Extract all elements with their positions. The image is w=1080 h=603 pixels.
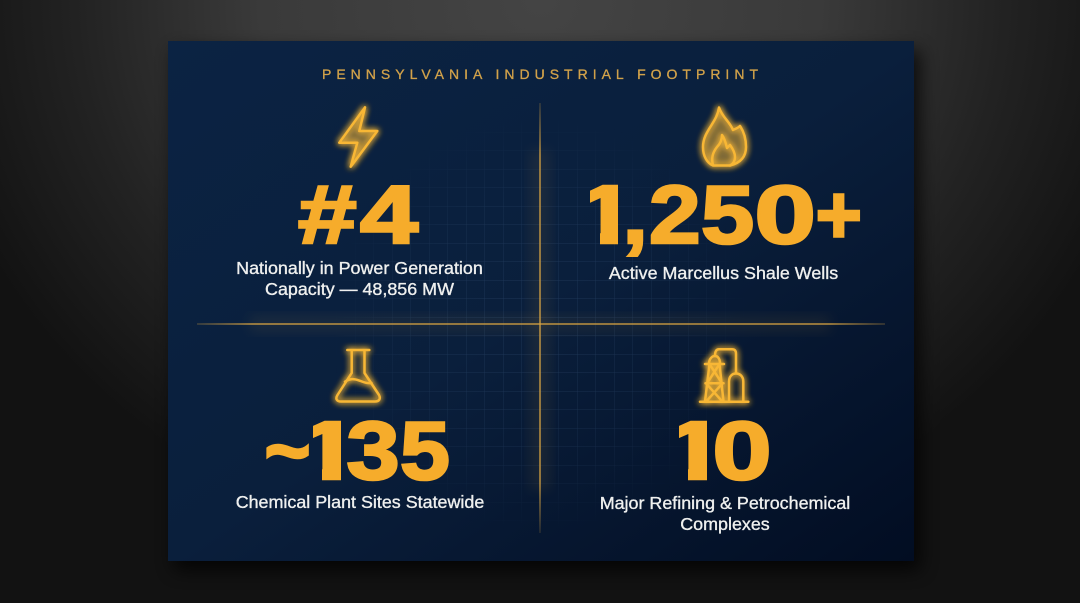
stat: #4 (298, 169, 418, 261)
stat: ~135: 1 (296, 404, 363, 497)
icon: flame (703, 108, 746, 166)
stat: 1,250+: 2 (649, 168, 701, 261)
title: PENNSYLVANIA INDUSTRIAL FOOTPRINT (322, 66, 758, 82)
stat: 1,250+: 0 (754, 168, 816, 261)
stat: 10: 0 (712, 405, 772, 497)
stat: 1,250+: 1 (576, 168, 639, 261)
stat: 10 (679, 420, 769, 482)
panel: refining stat (600, 349, 850, 534)
stat: ~135 (266, 420, 449, 482)
icon: flask (336, 350, 380, 402)
divider lines (197, 103, 885, 533)
label: active wells: Active Marcellus Shale Wells (609, 263, 838, 283)
stat: 1,250+: , (622, 169, 648, 261)
panel: power generation stat (236, 107, 483, 299)
stat: ~135: ~ (264, 405, 311, 497)
label: power generation capacity: Capacity — 48,856 MW (265, 279, 454, 299)
label: chemical plants: Chemical Plant Sites Statewide (236, 492, 484, 512)
label: power generation capacity: Nationally in Power Generation (236, 258, 483, 278)
panel drop shadow (174, 50, 920, 570)
stat: 1,250+: 5 (701, 168, 754, 261)
icon: lightning bolt (339, 107, 377, 167)
stat: ~135: 5 (400, 405, 450, 497)
panel: shale wells stat (576, 108, 862, 283)
stat: 1,250+: + (816, 169, 862, 261)
stat: #4: 4 (360, 169, 418, 261)
panel: navy board (168, 41, 914, 561)
panel: chemical plants stat (236, 350, 484, 512)
background grid (369, 150, 712, 502)
label: refining complexes: Major Refining & Petrochemical (600, 493, 850, 513)
stat: ~135: 3 (346, 404, 400, 497)
stat: 10: 1 (662, 404, 729, 497)
icon: refinery (700, 349, 748, 402)
label: refining complexes: Complexes (680, 514, 770, 534)
stat: #4: # (298, 169, 357, 261)
stat: 1,250+ (590, 184, 860, 257)
